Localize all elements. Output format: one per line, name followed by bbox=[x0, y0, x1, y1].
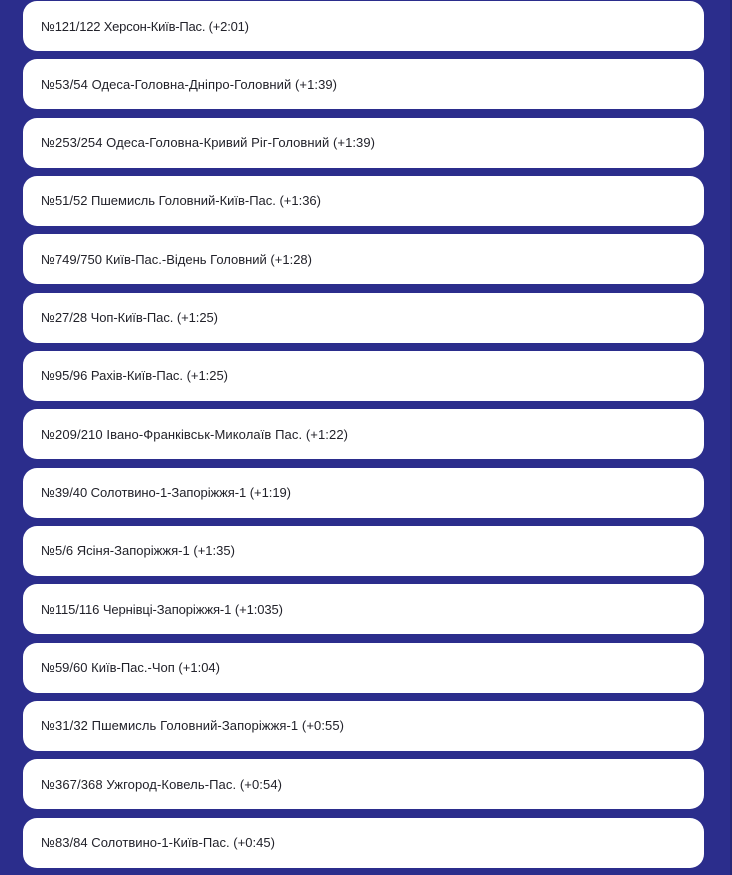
card: train 95/96: №95/96 Рахів-Київ-Пас. (+1:25) bbox=[41, 368, 228, 383]
card: train 39/40: №39/40 Солотвино-1-Запоріжжя-1 (+1:19) bbox=[41, 485, 291, 500]
card: train 253/254: №253/254 Одеса-Головна-Кривий Ріг-Головний (+1:39) bbox=[41, 135, 375, 150]
card: train 83/84: №83/84 Солотвино-1-Київ-Пас. (+0:45) bbox=[41, 835, 275, 850]
card: train 115/116 bbox=[23, 584, 704, 634]
card: train 367/368: №367/368 Ужгород-Ковель-Пас. (+0:54) bbox=[41, 777, 282, 792]
card: train 749/750: №749/750 Київ-Пас.-Відень Головний (+1:28) bbox=[41, 252, 312, 267]
card: train 749/750 bbox=[23, 234, 704, 284]
card: train 5/6: №5/6 Ясіня-Запоріжжя-1 (+1:35) bbox=[41, 543, 235, 558]
card: train 27/28: №27/28 Чоп-Київ-Пас. (+1:25) bbox=[41, 310, 218, 325]
card: train 51/52 bbox=[23, 176, 704, 226]
card: train 83/84 bbox=[23, 818, 704, 868]
card: train 51/52: №51/52 Пшемисль Головний-Київ-Пас. (+1:36) bbox=[41, 193, 321, 208]
card: train 115/116: №115/116 Чернівці-Запоріжжя-1 (+1:035) bbox=[41, 602, 283, 617]
card: train 53/54 bbox=[23, 59, 704, 109]
card: train 367/368 bbox=[23, 759, 704, 809]
card: train 31/32: №31/32 Пшемисль Головний-Запоріжжя-1 (+0:55) bbox=[41, 718, 344, 733]
card: train 31/32 bbox=[23, 701, 704, 751]
card: train 53/54: №53/54 Одеса-Головна-Дніпро-Головний (+1:39) bbox=[41, 77, 337, 92]
card: train 27/28 bbox=[23, 293, 704, 343]
card: train 95/96 bbox=[23, 351, 704, 401]
card: train 39/40 bbox=[23, 468, 704, 518]
card: train 209/210: №209/210 Івано-Франківськ-Миколаїв Пас. (+1:22) bbox=[41, 427, 348, 442]
card: train 121/122: №121/122 Херсон-Київ-Пас. (+2:01) bbox=[41, 19, 249, 34]
card: train 253/254 bbox=[23, 118, 704, 168]
card: train 209/210 bbox=[23, 409, 704, 459]
card: train 121/122 bbox=[23, 1, 704, 51]
card: train 59/60: №59/60 Київ-Пас.-Чоп (+1:04) bbox=[41, 660, 220, 675]
card: train 59/60 bbox=[23, 643, 704, 693]
card: train 5/6 bbox=[23, 526, 704, 576]
